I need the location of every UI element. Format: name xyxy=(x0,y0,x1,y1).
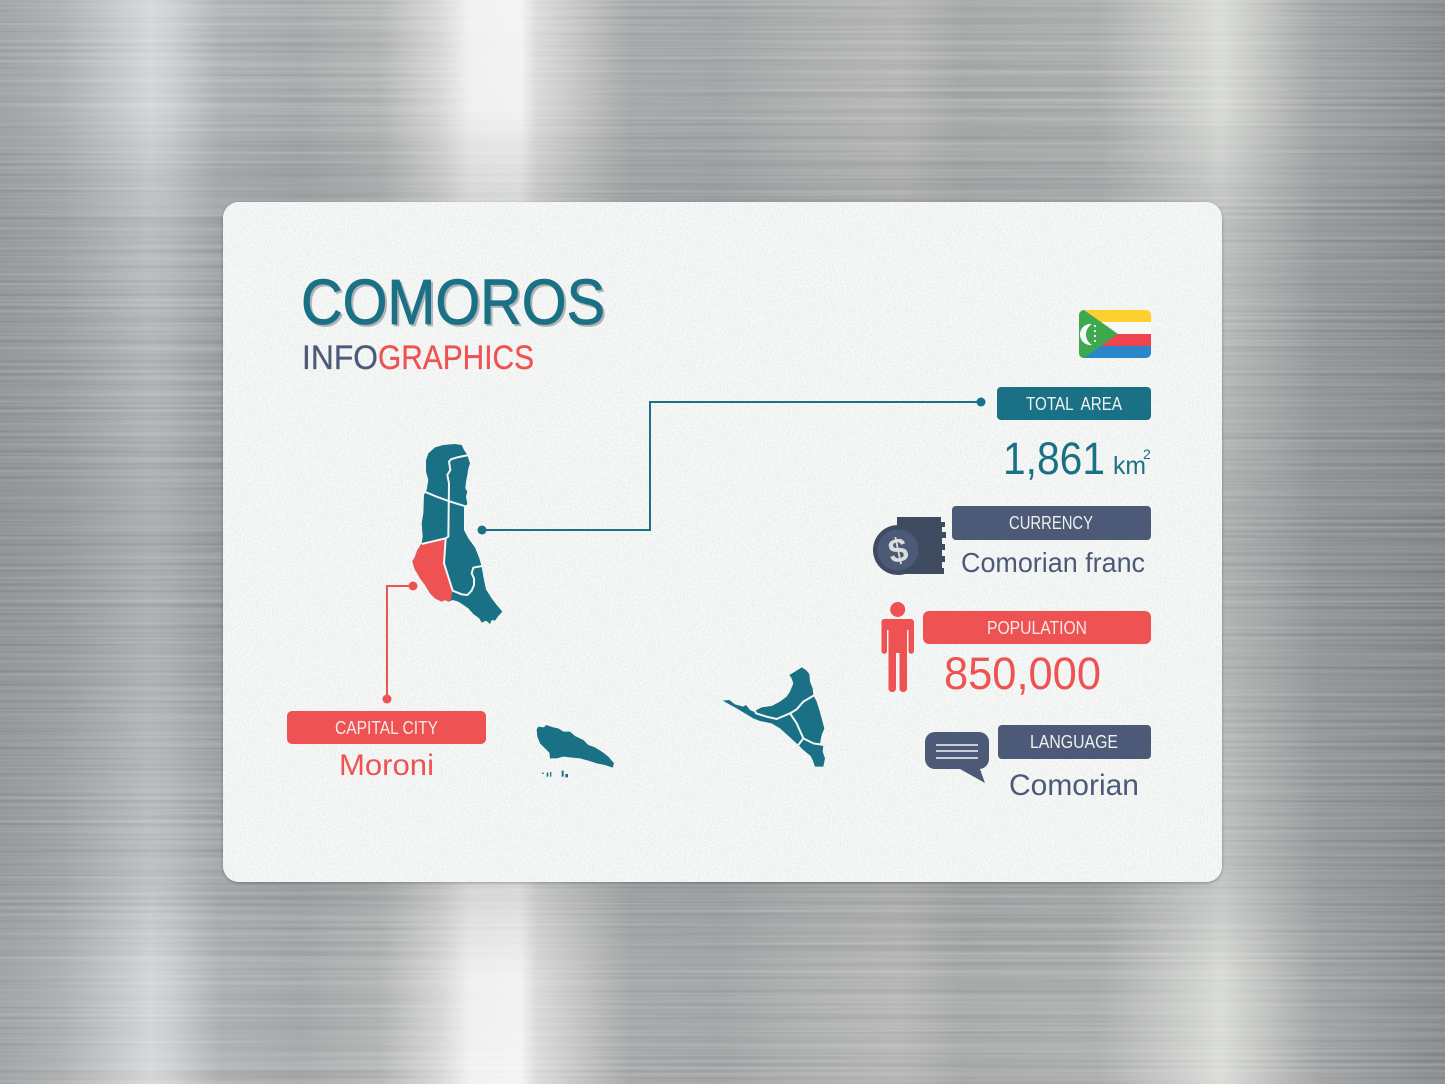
connector: capital region to label xyxy=(382,582,418,704)
icon: speech bubble xyxy=(925,732,989,783)
value: 1,861 km2: 1,861 xyxy=(1003,433,1105,484)
map: Grande Comore island xyxy=(412,444,502,624)
value: 1,861 km2: 2 xyxy=(1143,446,1151,462)
label: capital city xyxy=(287,711,486,744)
map: Moheli island xyxy=(537,725,614,777)
islets xyxy=(542,771,568,777)
label: currency: CURRENCY xyxy=(1009,513,1093,533)
capital city block xyxy=(287,711,486,782)
region borders xyxy=(754,695,824,745)
icon: coin stack: $ xyxy=(885,530,911,572)
icon: person xyxy=(881,602,914,692)
title: COMOROS: COMOROS xyxy=(301,266,605,338)
population block xyxy=(881,602,1151,699)
title: COMOROS: COMOROS xyxy=(303,268,607,340)
panel: white card xyxy=(223,202,1222,882)
currency block xyxy=(873,506,1151,578)
label: population xyxy=(923,611,1151,644)
icon: coin stack xyxy=(873,517,946,575)
label: capital city: CAPITAL CITY xyxy=(335,718,438,738)
subtitle: INFOGRAPHICS: INFO xyxy=(302,339,378,377)
value: 1,861 km2: km xyxy=(1113,452,1146,480)
label: total area: TOTAL AREA xyxy=(1026,394,1122,414)
label: language xyxy=(998,725,1151,759)
label: currency xyxy=(952,506,1151,540)
label: population: POPULATION xyxy=(987,618,1087,638)
label: language: LANGUAGE xyxy=(1030,732,1118,752)
value: Comorian: Comorian xyxy=(1009,769,1139,802)
subtitle: INFOGRAPHICS xyxy=(302,339,534,377)
capital region: Moroni xyxy=(412,538,453,602)
label: total area xyxy=(997,387,1151,420)
value: 850,000: 850,000 xyxy=(944,648,1101,699)
value: Moroni: Moroni xyxy=(339,749,434,782)
value: Comorian franc: Comorian franc xyxy=(961,547,1145,578)
language block xyxy=(925,725,1151,802)
subtitle: INFOGRAPHICS: GRAPHICS xyxy=(378,339,534,377)
total area block xyxy=(997,387,1151,484)
connector: map to total area xyxy=(478,398,986,534)
region borders xyxy=(422,455,482,595)
title block xyxy=(301,266,607,377)
icon: Comoros flag xyxy=(1079,310,1151,358)
map: Anjouan island xyxy=(723,667,825,767)
